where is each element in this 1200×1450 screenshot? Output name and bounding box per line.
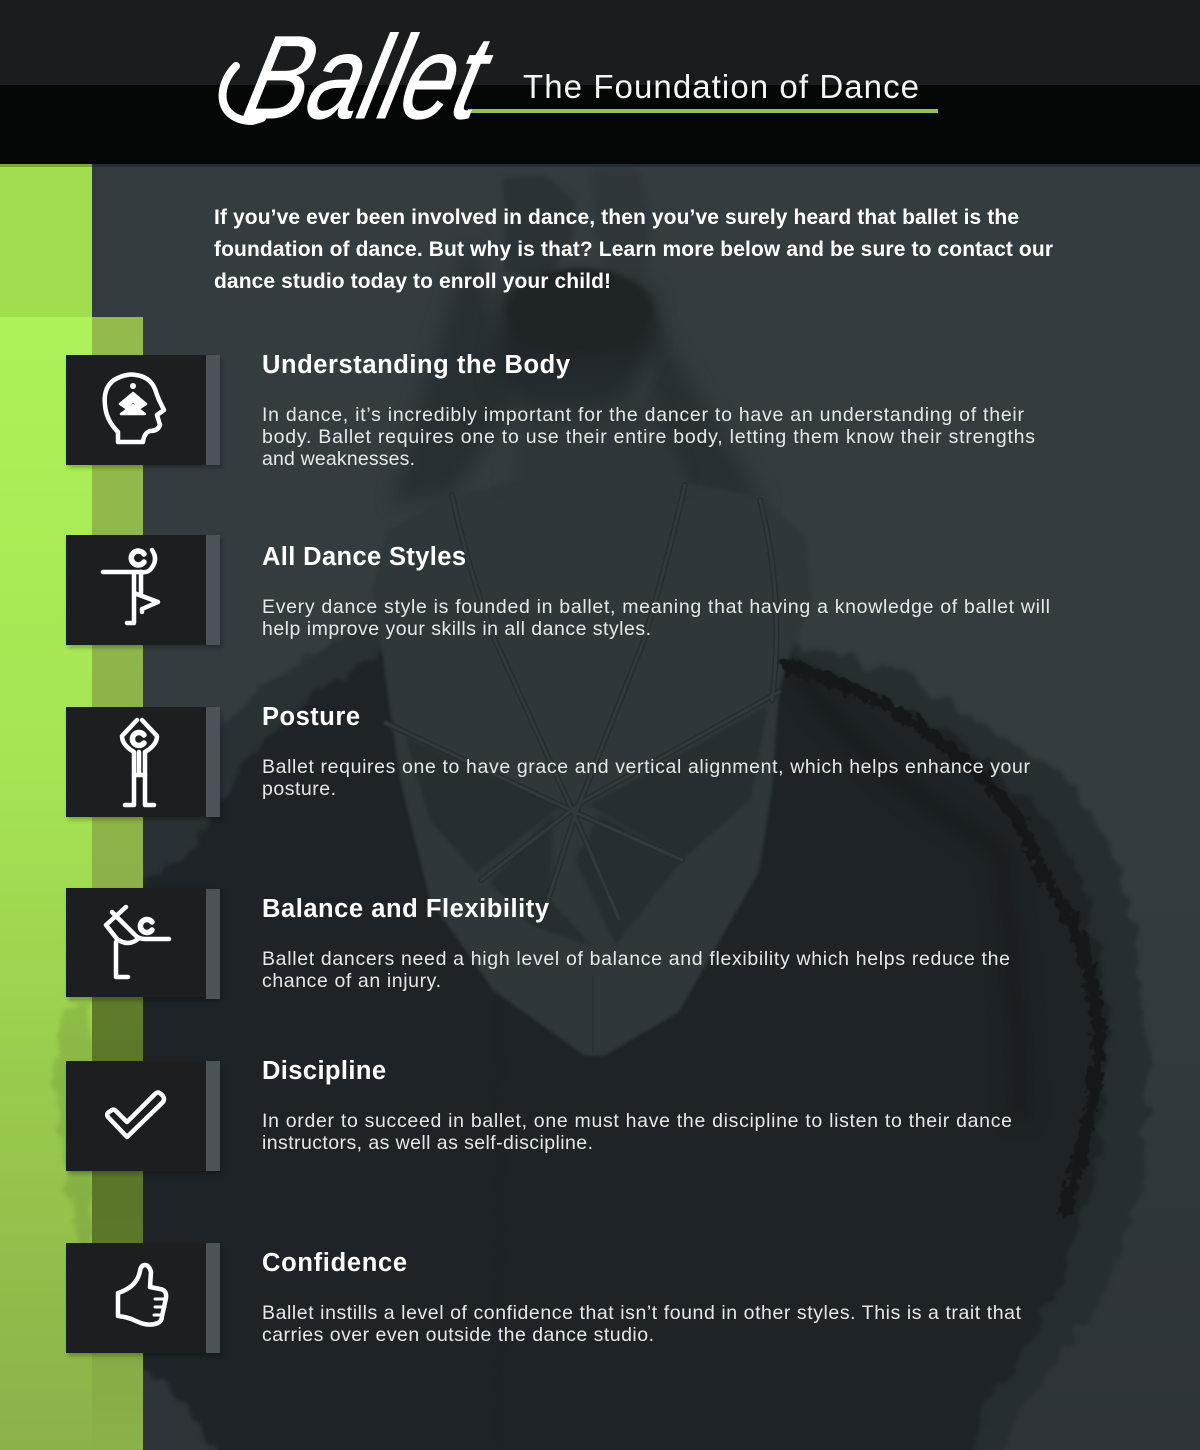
panel: balance and flexibility bbox=[66, 888, 1010, 1001]
card bbox=[66, 535, 222, 648]
icon: head with meditating figure bbox=[105, 375, 164, 442]
title: Ballet: Ballet bbox=[234, 13, 504, 144]
body text bbox=[262, 404, 1035, 470]
icon: check mark bbox=[107, 1092, 164, 1137]
body text bbox=[262, 1110, 1012, 1154]
left shoe bbox=[506, 178, 572, 276]
heading: Discipline bbox=[262, 1057, 386, 1085]
left green panel bbox=[0, 317, 92, 1450]
tutu inner band bbox=[800, 670, 1020, 1120]
heading: Understanding the Body bbox=[262, 351, 571, 379]
body text: In dance, it’s incredibly important for the dancer to have an understanding of their bbox=[262, 404, 1024, 426]
second green band bbox=[92, 317, 143, 1450]
icon: dancer with raised arms bbox=[122, 720, 157, 805]
neck bbox=[510, 400, 680, 482]
leotard center seam bbox=[592, 976, 594, 1053]
lace trim bbox=[788, 666, 1098, 1210]
hair bun bbox=[516, 266, 646, 298]
intro paragraph: foundation of dance. But why is that? Learn more below and be sure to contact our bbox=[214, 238, 1053, 261]
tutu inner bbox=[597, 657, 1110, 1450]
right shoe bbox=[592, 170, 650, 290]
body text: Ballet instills a level of confidence that isn’t found in other styles. This is a trait that bbox=[262, 1302, 1022, 1324]
card bbox=[66, 1061, 222, 1174]
leotard back opening bbox=[406, 705, 768, 947]
intro paragraph: If you’ve ever been involved in dance, then you’ve surely heard that ballet is the bbox=[214, 206, 1019, 229]
left green band upper bbox=[0, 164, 92, 317]
intro paragraph bbox=[214, 206, 1053, 293]
left arm bbox=[400, 266, 508, 498]
header bbox=[0, 0, 1200, 167]
tutu left feathers bbox=[143, 620, 380, 878]
heading: Confidence bbox=[262, 1249, 407, 1277]
dancer photo background bbox=[100, 170, 1146, 1450]
body text: instructors, as well as self-discipline. bbox=[262, 1132, 593, 1154]
strap highlights bbox=[386, 485, 779, 919]
body text: chance of an injury. bbox=[262, 970, 441, 992]
left tulle shadow bbox=[52, 1000, 92, 1243]
panel: discipline bbox=[66, 1057, 1012, 1174]
tutu left dark bbox=[143, 652, 506, 1450]
body text: Every dance style is founded in ballet, meaning that having a knowledge of ballet will bbox=[262, 596, 1050, 618]
panel: all dance styles bbox=[66, 535, 1050, 648]
card bbox=[66, 355, 222, 468]
body text: carries over even outside the dance studio. bbox=[262, 1324, 654, 1346]
body text: body. Ballet requires one to use their entire body, letting them know their strengths bbox=[262, 426, 1035, 448]
intro paragraph: dance studio today to enroll your child! bbox=[214, 270, 611, 293]
header top band bbox=[0, 0, 1200, 86]
card bbox=[66, 888, 222, 1001]
icon: thumbs up bbox=[118, 1265, 166, 1325]
body text: and weaknesses. bbox=[262, 448, 415, 470]
torso: back and leotard bbox=[382, 640, 792, 1056]
leotard straps bbox=[386, 485, 779, 919]
body text bbox=[262, 596, 1050, 640]
body text: posture. bbox=[262, 778, 336, 800]
title underline bbox=[468, 109, 938, 113]
header shadow bbox=[0, 164, 1200, 167]
panel: posture bbox=[66, 703, 1030, 820]
icon: dancer in passe bbox=[103, 550, 158, 623]
heading: Posture bbox=[262, 703, 360, 731]
panel: understanding the body bbox=[66, 351, 1035, 470]
body text: In order to succeed in ballet, one must have the discipline to listen to their dance bbox=[262, 1110, 1012, 1132]
card bbox=[66, 707, 222, 820]
right arm bbox=[654, 351, 750, 492]
body text: Ballet requires one to have grace and vertical alignment, which helps enhance your bbox=[262, 756, 1030, 778]
body text: Ballet dancers need a high level of balance and flexibility which helps reduce the bbox=[262, 948, 1010, 970]
heading: Balance and Flexibility bbox=[262, 895, 550, 923]
card bbox=[66, 1243, 222, 1356]
panel: confidence bbox=[66, 1243, 1022, 1356]
body text bbox=[262, 948, 1010, 992]
icon: dancer in arabesque bbox=[106, 907, 169, 977]
body text bbox=[262, 756, 1030, 800]
heading: All Dance Styles bbox=[262, 543, 466, 571]
hair bbox=[493, 290, 660, 412]
subtitle: The Foundation of Dance bbox=[523, 68, 919, 105]
body text bbox=[262, 1302, 1022, 1346]
tutu shadow over green bbox=[50, 997, 143, 1243]
band shadow bbox=[92, 997, 143, 1243]
tutu outer tulle bbox=[792, 643, 1151, 1448]
header bottom band bbox=[0, 85, 1200, 164]
body text: help improve your skills in all dance styles. bbox=[262, 618, 651, 640]
